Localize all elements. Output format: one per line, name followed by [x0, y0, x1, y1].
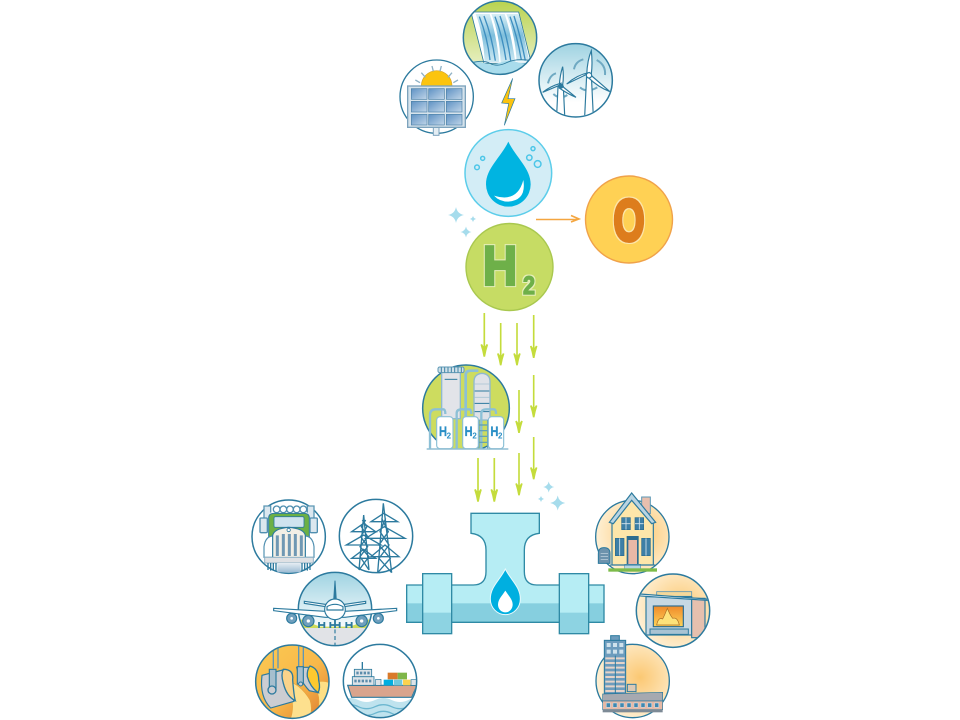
pipeline tee: [407, 513, 604, 634]
icon: container ship: [342, 644, 422, 720]
oxygen circle: O: [614, 188, 644, 254]
icon: hydrogen storage plant: 2: [498, 432, 503, 441]
hydrogen circle: 2: [523, 272, 535, 300]
icon: steel ladles: [256, 645, 332, 720]
icon: hydrogen storage plant: 2: [472, 432, 477, 441]
water droplet circle: [465, 130, 552, 216]
icon: wind turbines: [539, 44, 612, 117]
icon: fireplace: [636, 574, 710, 647]
icon: hydrogen storage plant: H: [490, 423, 498, 439]
icon: power pylons: [339, 499, 413, 573]
icon: hydrogen storage plant: 2: [447, 432, 452, 441]
icon: water drop: [486, 142, 531, 207]
sparkles near pipe: [538, 482, 565, 510]
icon: solar panel: [400, 60, 473, 135]
icon: hydrogen storage plant: H: [465, 423, 473, 439]
left flange: [423, 574, 452, 634]
hydrogen circle: [466, 224, 553, 310]
oxygen circle: [586, 176, 672, 263]
sparkles near hydrogen: [448, 207, 476, 238]
icon: hydroelectric dam: [462, 0, 538, 76]
arrow: to oxygen: [536, 216, 579, 222]
icon: gas flame drop: [490, 569, 520, 615]
hydrogen circle: H: [483, 234, 517, 296]
icon: hydrogen storage plant: H: [439, 423, 447, 439]
icon: hydrogen storage plant: [423, 365, 509, 452]
icon: industrial building: [596, 636, 669, 718]
green flow arrows: [475, 313, 537, 502]
hydrogen infographic: [251, 0, 710, 720]
icon: house: [596, 493, 669, 574]
icon: truck: [252, 500, 325, 573]
icon: airplane: [274, 572, 397, 650]
icon: lightning bolt: [502, 78, 515, 125]
right flange: [559, 574, 589, 634]
